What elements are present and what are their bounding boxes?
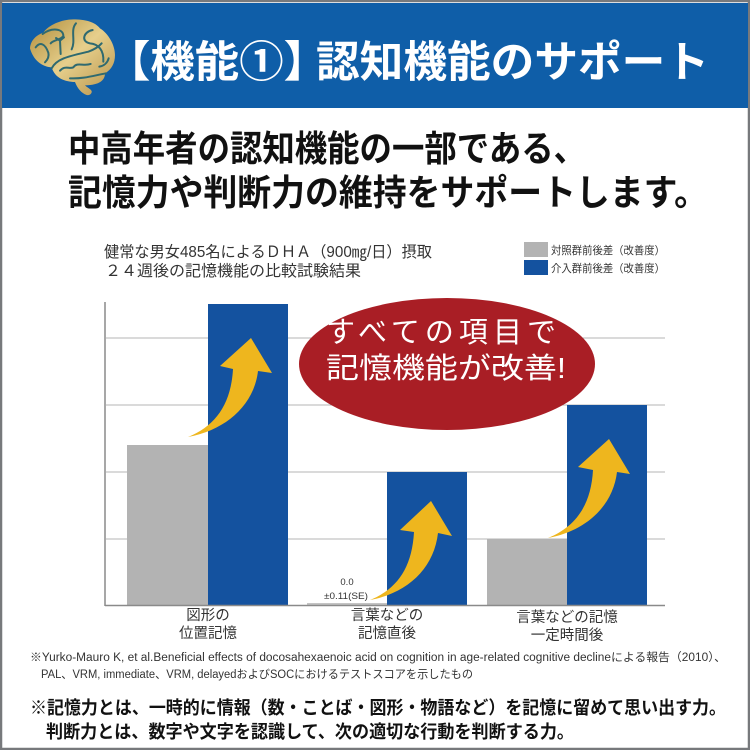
heading <box>106 39 709 87</box>
definition note: 判断力とは、数字や文字を認識して、次の適切な行動を判断する力。 <box>46 722 574 742</box>
reference note: ※Yurko-Mauro K, et al.Beneficial effects of docosahexaenoic acid on cognition in age-related cognitive declineによる報告（2010）、 <box>30 651 726 664</box>
callout <box>299 298 595 430</box>
category labels: 言葉などの記憶 <box>516 609 618 626</box>
category labels: 位置記憶 <box>179 625 237 642</box>
chart caption <box>104 243 432 280</box>
category labels <box>179 607 618 644</box>
header band <box>2 3 748 108</box>
main message <box>68 128 708 213</box>
bars: 図形の位置記憶 <box>127 304 288 605</box>
category labels: 図形の <box>186 607 230 624</box>
bars: 言葉などの記憶直後 <box>307 472 467 605</box>
main message: 記憶力や判断力の維持をサポートします。 <box>68 172 708 213</box>
category labels: 記憶直後 <box>358 625 416 642</box>
definition note: ※記憶力とは、一時的に情報（数・ことば・図形・物語など）を記憶に留めて思い出す力。 <box>30 698 726 718</box>
value label: 0.0 <box>340 577 354 588</box>
reference note <box>30 651 726 681</box>
arrow: third group <box>548 439 630 538</box>
category labels: 一定時間後 <box>531 627 604 644</box>
bars: 言葉などの記憶一定時間後 <box>487 405 647 605</box>
category labels: 言葉などの <box>351 607 423 624</box>
reference note: PAL、VRM, immediate、VRM, delayedおよびSOCにおけるテストスコアを示したもの <box>41 668 473 681</box>
heading: 【機能①】 <box>106 39 328 87</box>
callout: 記憶機能が改善! <box>326 352 566 385</box>
definition note <box>30 698 726 742</box>
arrow: second group <box>370 501 452 600</box>
icon: gold brain <box>30 19 115 95</box>
bar chart <box>105 302 665 606</box>
heading: 認知機能のサポート <box>316 39 709 87</box>
chart caption: 健常な男女485名によるＤＨＡ（900㎎/日）摂取 <box>104 243 432 261</box>
value label: ±0.11(SE) <box>324 591 368 602</box>
callout: すべての項目で <box>326 317 556 349</box>
chart caption: ２４週後の記憶機能の比較試験結果 <box>105 262 361 280</box>
arrow: first group <box>188 338 272 437</box>
main message: 中高年者の認知機能の一部である、 <box>68 128 586 169</box>
legend: 対照群前後差（改善度） <box>551 243 665 257</box>
legend <box>524 242 665 275</box>
legend: 介入群前後差（改善度） <box>551 261 665 275</box>
value label <box>324 577 368 602</box>
